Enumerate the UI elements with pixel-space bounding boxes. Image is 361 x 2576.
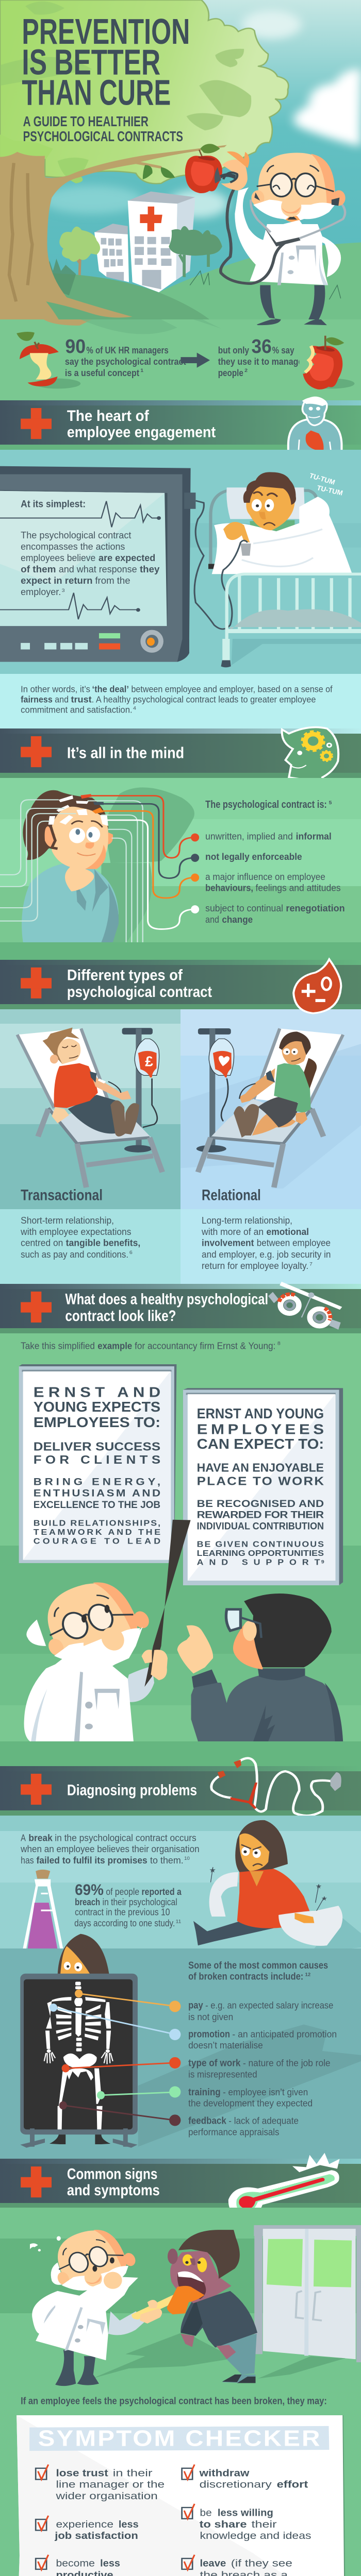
text: transactional: 6 <box>129 1250 133 1256</box>
symptom: withdraw effort <box>182 2465 308 2490</box>
tree canopy <box>0 0 288 183</box>
eye chart: employee expectations: 9 <box>321 1560 324 1565</box>
text: causes list: pay <box>188 2001 203 2011</box>
heading: Common signs <box>67 2165 157 2182</box>
text: relational: 7 <box>309 1262 313 1267</box>
text: causes list: - lack of adequate <box>228 2116 299 2126</box>
intro text: 8 <box>277 1341 281 1346</box>
text: relational: between employee <box>257 1238 331 1248</box>
text: transactional: Short-term relationship, <box>21 1215 114 1226</box>
stat: 90 percent: say the psychological contract <box>65 357 186 367</box>
panel: at its simplest <box>0 450 361 674</box>
icon: head with gears <box>282 727 338 788</box>
monitor base and controls <box>0 630 189 662</box>
symptom: lose trust: in their <box>113 2468 153 2479</box>
woman with bandaged arms: ★ <box>316 1883 322 1890</box>
text: causes list: - employee isn’t given <box>223 2087 308 2097</box>
panel: break in the contract <box>0 1816 361 1962</box>
panel: common signs and symptoms <box>0 2208 361 2576</box>
heading <box>67 967 212 1001</box>
panel: healthy contract <box>0 1333 361 1741</box>
symptom: less willing to share: less willing <box>218 2507 273 2518</box>
text: break: in the psychological contract occurs <box>55 1833 196 1843</box>
text: causes list: - nature of the job role <box>243 2058 331 2069</box>
panel: diagnosing problems header <box>0 1758 361 1816</box>
bed leg <box>221 639 361 667</box>
monitor text: from the <box>95 575 130 586</box>
heading: The heart of <box>67 407 149 424</box>
intro text: Take this simplified <box>21 1341 95 1351</box>
text: transactional <box>20 1215 140 1260</box>
text: causes list <box>188 1960 337 2138</box>
apple with stethoscope <box>185 155 236 193</box>
stat: 36 percent: 2 <box>244 368 248 374</box>
text: relational <box>201 1215 331 1272</box>
eye chart: employee expectations: ERNST AND YOUNG <box>197 1405 324 1421</box>
monitor ecg lines <box>0 501 159 619</box>
arrow <box>180 352 210 368</box>
icon: thermometer <box>228 2153 339 2218</box>
eye chart: employer expectations: EMPLOYEES TO: <box>34 1414 160 1430</box>
list: psychological contract is: not legally enforceable <box>205 852 302 862</box>
doctor with pointer <box>24 1520 191 1741</box>
shadow <box>138 2025 361 2147</box>
monitor <box>0 466 195 639</box>
text: causes list: the development they expected <box>188 2098 313 2109</box>
text: causes list: 12 <box>305 1972 311 1977</box>
eye chart: employer expectations <box>19 1364 176 1563</box>
monitor text: expect in return <box>21 575 92 586</box>
symptom: lose trust: lose trust <box>56 2468 108 2479</box>
symptom checker title: SYMPTOM CHECKER <box>38 2426 320 2451</box>
panel: healthy contract header <box>0 1283 361 1333</box>
symptom: leave <box>182 2555 292 2576</box>
panel: in other words text: fairness <box>21 694 53 704</box>
eye chart: employee expectations: EMPLOYEES <box>197 1421 324 1437</box>
panel: heart of employee engagement header <box>0 397 361 455</box>
text: break: failed to fulfil its promises <box>37 1855 147 1866</box>
symptom: withdraw effort: discretionary <box>200 2479 272 2490</box>
symptom: less willing to share: be <box>200 2507 212 2518</box>
heading: relational: Relational <box>202 1187 261 1204</box>
panel: in other words text: trust <box>71 694 92 704</box>
stat: 36 percent: 36 <box>251 335 272 358</box>
text: transactional: centred on <box>21 1238 63 1248</box>
symptom: lose trust: line manager or the <box>56 2479 165 2490</box>
shadow of head <box>104 787 194 863</box>
subtitle <box>23 114 183 145</box>
monitor text: are expected <box>99 553 155 564</box>
patient in bed: TU-TUM <box>308 472 336 487</box>
list: psychological contract is: renegotiation <box>286 903 345 914</box>
text: causes list: is misrepresented <box>188 2069 257 2080</box>
title <box>22 11 190 113</box>
stat: 69 percent: in their psychological <box>103 1897 177 1908</box>
iv pole <box>196 1028 234 1153</box>
text: break: to them. <box>150 1855 184 1866</box>
eye chart: employee expectations: REWARDED FOR THEIR <box>197 1510 324 1520</box>
icon: red cross <box>21 968 52 998</box>
monitor text: of them <box>21 564 56 575</box>
stat: 90 percent: 90 <box>65 335 86 358</box>
text: causes list: training <box>188 2087 221 2097</box>
text: relational: involvement <box>202 1238 254 1248</box>
stat: 90 percent: % of UK HR managers <box>86 345 169 356</box>
list: psychological contract is: change <box>222 914 253 925</box>
eye chart: employer expectations: DELIVER SUCCESS <box>34 1440 160 1453</box>
stat: 36 percent: people <box>218 368 243 379</box>
man seen from behind <box>177 1594 343 1741</box>
stat: 69 percent: 69% <box>75 1882 104 1899</box>
deckchair <box>198 1028 343 1188</box>
panel: hero stats <box>0 319 361 400</box>
heading: contract look like? <box>65 1307 176 1324</box>
heading: employee engagement <box>67 423 216 440</box>
icon: red cross <box>21 736 52 767</box>
text: relational: emotional <box>266 1227 309 1238</box>
symptom: leave: leave <box>200 2558 226 2569</box>
icon: person with heart <box>288 397 341 455</box>
heading <box>67 2165 160 2198</box>
door <box>254 2225 361 2362</box>
heading: transactional: Transactional <box>21 1187 103 1204</box>
symptom: lose trust <box>36 2465 165 2502</box>
deckchair <box>17 1028 162 1188</box>
monitor text: and what response <box>59 564 137 575</box>
eye chart: employee expectations: INDIVIDUAL CONTRIBUTION <box>197 1521 324 1532</box>
stat: 69 percent: contract in the previous 10 <box>75 1907 170 1918</box>
title: PREVENTION <box>22 11 190 52</box>
text: break <box>20 1833 200 1866</box>
symptom: withdraw effort: withdraw <box>199 2468 250 2479</box>
stat: 36 percent: they use it to manage <box>218 357 303 367</box>
heading: and symptoms <box>67 2181 160 2198</box>
eye chart: employer expectations: ERNST AND <box>34 1384 160 1400</box>
leaves <box>143 144 220 179</box>
text: break: break <box>28 1833 53 1843</box>
panel: transactional <box>0 1009 361 1284</box>
symptom: job satisfaction: experience <box>56 2519 113 2530</box>
heading: Diagnosing problems <box>67 1781 197 1799</box>
text: relational: Long-term relationship, <box>202 1215 292 1226</box>
symptom: less productive: less <box>100 2558 120 2569</box>
eye chart: employee expectations: AND SUPPORT <box>197 1557 320 1567</box>
iv pole <box>122 1028 159 1153</box>
symptom: less willing to share: their <box>251 2519 277 2530</box>
doctor with stethoscope <box>221 151 346 319</box>
panel: different types header <box>0 960 361 1009</box>
panel: relational <box>180 959 361 1284</box>
intro text: example <box>97 1341 132 1351</box>
iv pole: £ <box>145 1054 153 1070</box>
stat: 69 percent <box>74 1882 182 1929</box>
text: break: A <box>21 1833 26 1843</box>
woman behind xray with skeleton <box>20 1934 175 2148</box>
list: psychological contract is: and <box>205 914 219 925</box>
text: causes list: - an anticipated promotion <box>232 2029 337 2040</box>
symptom: leave: (if they see <box>231 2558 292 2569</box>
icon: bitten apple <box>299 336 354 389</box>
heading <box>65 1290 268 1324</box>
stat: 36 percent: but only <box>218 345 249 356</box>
text: relational: return for employee loyalty. <box>202 1261 308 1272</box>
monitor text: At its simplest: <box>21 499 86 510</box>
monitor text: employer. <box>21 587 61 598</box>
text: break: has <box>21 1855 34 1866</box>
list: psychological contract is: subject to continual <box>205 903 283 914</box>
text: causes list: promotion <box>188 2029 230 2040</box>
text: causes list: is not given <box>188 2012 233 2023</box>
icon: blood drop <box>293 959 341 1013</box>
list: psychological contract is: 5 <box>329 801 332 806</box>
monitor text: 3 <box>62 588 65 594</box>
eye chart: employer expectations: EXCELLENCE TO THE JOB <box>34 1499 160 1510</box>
woman giving blood <box>234 1031 317 1138</box>
list: psychological contract is: a major influence on employee <box>205 872 325 883</box>
clouds <box>41 10 361 218</box>
panel: all in the mind <box>0 778 361 942</box>
symptom: job satisfaction <box>36 2516 139 2541</box>
doctor feet <box>257 319 327 325</box>
symptom checker paper <box>17 2415 346 2576</box>
eye chart: employee expectations: BE GIVEN CONTINUOUS <box>197 1540 324 1549</box>
stat: 90 percent: 1 <box>140 368 144 374</box>
heading <box>67 407 216 440</box>
stat: 90 percent: is a useful concept <box>65 368 140 379</box>
icon: flask <box>22 1870 64 1962</box>
icon: red cross <box>21 408 52 439</box>
electrode wires <box>0 795 194 942</box>
stat: 36 percent <box>218 335 303 379</box>
stat: 69 percent: 11 <box>176 1919 182 1924</box>
eye chart: employee expectations: BE RECOGNISED AND <box>197 1498 324 1510</box>
text: causes list: doesn’t materialise <box>188 2040 263 2051</box>
eye chart: employee expectations <box>183 1388 343 1585</box>
list: psychological contract is: informal <box>296 832 332 842</box>
text: relational: with more of an <box>201 1227 264 1238</box>
symptom: withdraw effort: effort <box>277 2479 308 2490</box>
title: THAN CURE <box>22 73 171 113</box>
text: causes list: - e.g. an expected salary increase <box>205 2001 333 2011</box>
panel: in other words text: In other words, it’s <box>21 684 90 694</box>
symptom: less productive: become <box>56 2558 95 2569</box>
patient in bed <box>194 472 361 639</box>
trees near hospital <box>59 226 222 277</box>
panel: in other words text: 4 <box>133 706 136 711</box>
text: causes list: feedback <box>188 2116 226 2126</box>
stat: 69 percent: breach <box>75 1897 100 1908</box>
monitor text: employees believe <box>21 553 95 564</box>
panel: causes of broken contracts <box>0 1934 361 2159</box>
hospital <box>94 192 195 292</box>
panel: in other words text <box>0 674 361 728</box>
panel: common signs header <box>0 2153 361 2218</box>
symptom: less willing to share: to share <box>200 2519 247 2530</box>
symptom: lose trust: wider organisation <box>55 2490 158 2502</box>
panel: all in the mind header <box>0 727 361 788</box>
stat: 69 percent: days according to one study. <box>74 1918 175 1929</box>
doctor with tongue depressor <box>30 2221 178 2386</box>
eye chart: employee expectations: PLACE TO WORK <box>197 1475 324 1488</box>
floor shadows <box>92 2332 346 2379</box>
text: causes list: type of work <box>188 2058 241 2069</box>
heading: What does a healthy psychological <box>65 1290 268 1308</box>
eye chart: employee expectations: CAN EXPECT TO: <box>197 1436 324 1452</box>
text: transactional: with employee expectations <box>20 1227 131 1238</box>
symptom: less productive <box>36 2555 120 2576</box>
symptom: less willing to share: knowledge and ideas <box>200 2530 311 2541</box>
icon: eaten apple core <box>17 332 80 388</box>
eye chart: employee expectations: HAVE AN ENJOYABLE <box>197 1462 324 1475</box>
text: transactional: such as pay and conditions. <box>21 1249 128 1260</box>
intro text <box>21 1341 281 1351</box>
text: transactional: tangible benefits, <box>66 1238 140 1248</box>
man giving blood <box>43 1027 139 1137</box>
eye chart: employer expectations: YOUNG EXPECTS <box>34 1399 160 1415</box>
text: break: when an employee believes their organisation <box>20 1844 200 1855</box>
heading: It’s all in the mind <box>67 743 184 761</box>
eye chart: employer expectations: BRING ENERGY, <box>34 1477 160 1487</box>
icon: red cross <box>21 1292 52 1323</box>
symptom: job satisfaction: less <box>119 2519 139 2530</box>
eye chart: employer expectations: BUILD RELATIONSHIPS, <box>34 1519 160 1528</box>
patient in bed: TU-TUM <box>316 484 343 497</box>
panel: in other words text: . A healthy psychological contract leads to greater employee <box>92 694 316 704</box>
monitor text: they <box>140 564 160 575</box>
woman with bandaged arms <box>193 1820 361 1953</box>
stat: 69 percent: reported a <box>142 1887 182 1897</box>
intro text: for accountancy firm Ernst & Young: <box>135 1341 275 1351</box>
list: psychological contract is: feelings and attitudes <box>256 883 341 893</box>
eye chart: employee expectations: LEARNING OPPORTUNITIES <box>197 1549 324 1558</box>
woman with bandaged arms: ★ <box>209 1867 216 1874</box>
text: causes list: of broken contracts include: <box>188 1971 303 1982</box>
panel: in other words text: ‘the deal’ <box>92 684 129 694</box>
stat: 69 percent: of people <box>106 1887 139 1897</box>
sick man <box>167 2230 257 2383</box>
hills <box>0 243 361 319</box>
stat: 36 percent: % say <box>272 345 294 356</box>
title: IS BETTER <box>22 42 160 82</box>
list: psychological contract is <box>205 798 345 925</box>
monitor text: encompasses the actions <box>21 541 125 552</box>
eye chart: employer expectations: TEAMWORK AND THE <box>34 1528 160 1537</box>
monitor text: The psychological contract <box>21 530 132 541</box>
woman with bandaged arms: ★ <box>321 1895 327 1902</box>
subtitle: PSYCHOLOGICAL CONTRACTS <box>23 129 183 145</box>
tree trunk and branch <box>0 145 227 319</box>
icon: red cross <box>21 2166 52 2197</box>
text: causes list: performance appraisals <box>188 2127 279 2138</box>
monitor text <box>21 499 160 598</box>
icon: eye test gauges <box>268 1283 341 1330</box>
text: relational: and employer, e.g. job security in <box>202 1249 331 1260</box>
symptom: job satisfaction: job satisfaction <box>54 2530 138 2541</box>
list: psychological contract is: unwritten, implied and <box>205 832 293 842</box>
subtitle: A GUIDE TO HEALTHIER <box>23 114 149 130</box>
stat: 90 percent <box>65 335 186 379</box>
woman thinking <box>22 790 119 942</box>
heading: Different types of <box>67 967 183 984</box>
list: psychological contract is: behaviours, <box>205 883 253 893</box>
panel: in other words text: commitment and satisfaction. <box>21 705 133 715</box>
eye chart: employer expectations: ENTHUSIASM AND <box>34 1488 160 1499</box>
heading: psychological contract <box>67 983 212 1001</box>
icon: red cross <box>21 1774 52 1805</box>
panel: in other words text: and <box>55 694 69 704</box>
panel: hero illustration <box>0 0 361 319</box>
icon: stethoscope <box>211 1758 341 1816</box>
symptom: less willing to share <box>182 2504 311 2541</box>
eye chart: employer expectations: COURAGE TO LEAD <box>34 1536 160 1546</box>
text: break: 10 <box>184 1856 190 1861</box>
eye chart: employer expectations: FOR CLIENTS <box>34 1453 160 1467</box>
